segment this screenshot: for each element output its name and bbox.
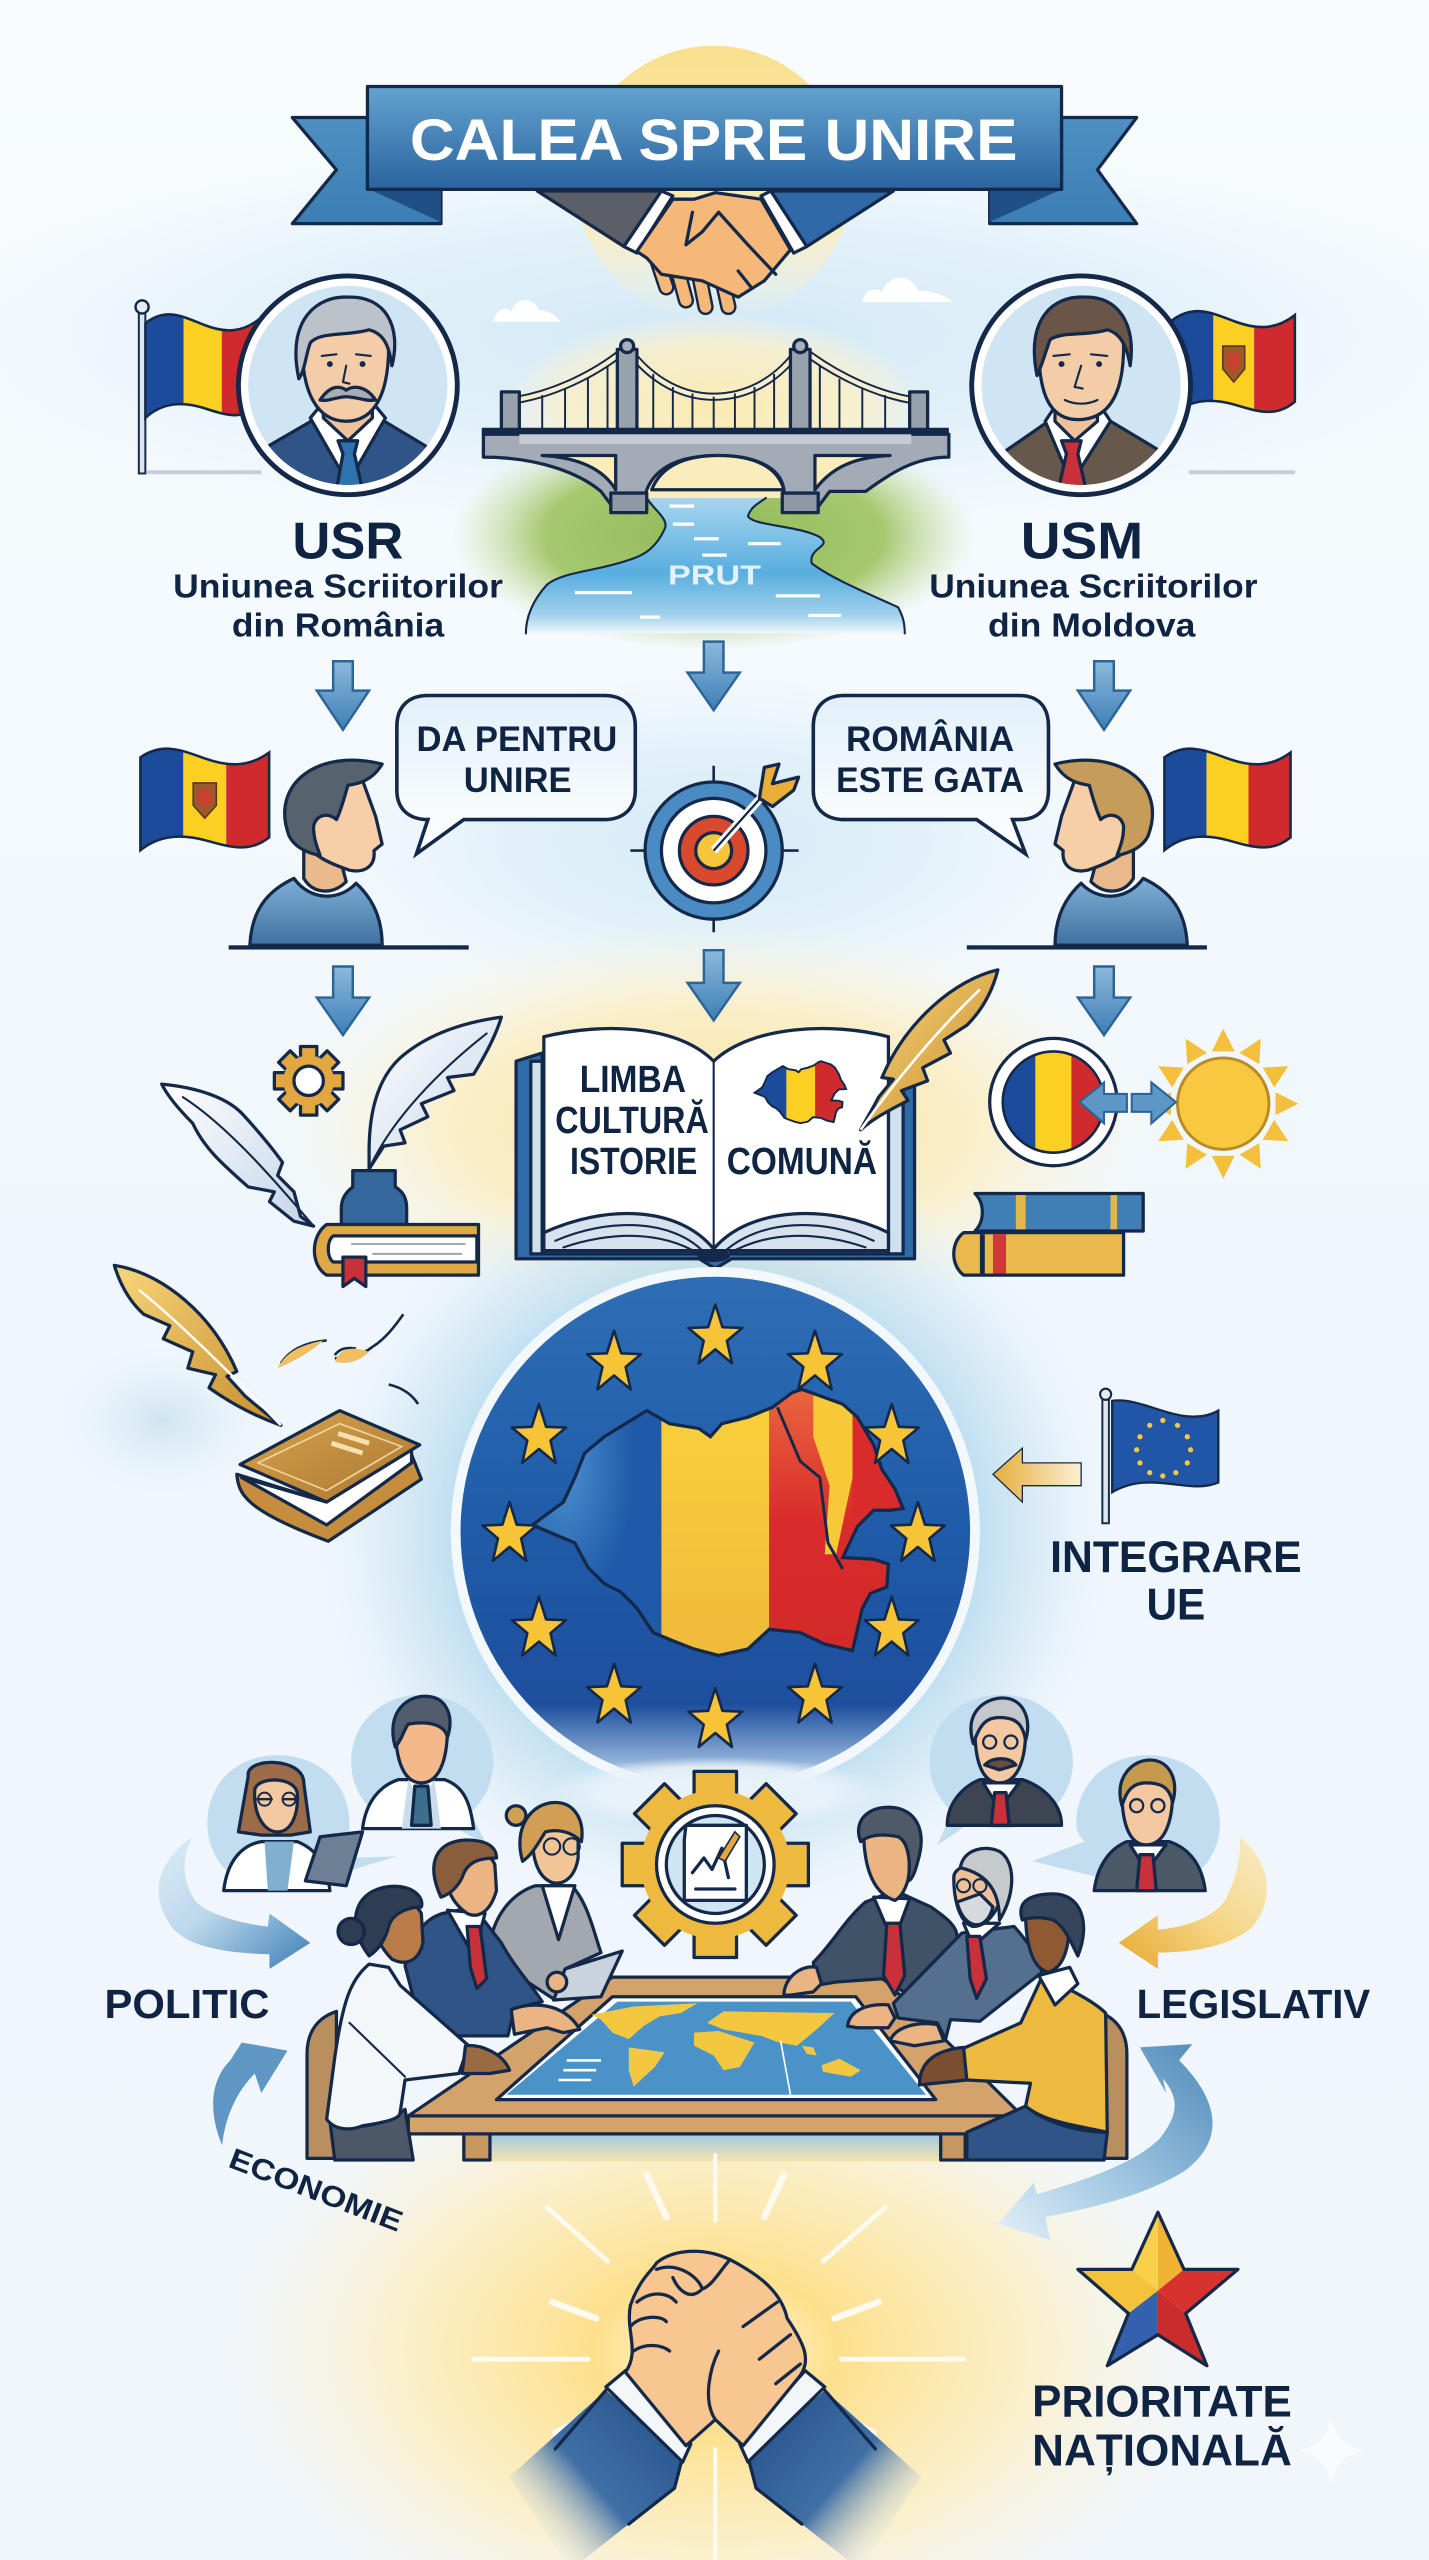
hand (511, 2005, 580, 2034)
river banks (452, 421, 975, 650)
person right with Romania flag (967, 748, 1291, 950)
icon: small gear (274, 1047, 343, 1115)
title banner (292, 87, 1137, 224)
hands (625, 2251, 806, 2446)
person left with Moldova flag (140, 748, 469, 950)
flag: Moldova (1173, 310, 1295, 424)
book text: COMUNĂ (727, 1140, 877, 1182)
figure (250, 760, 382, 945)
paper held (547, 1951, 622, 2000)
feather (114, 1265, 281, 1425)
advisor bubble: man in lab coat (351, 1695, 493, 1845)
portrait left with flag (136, 276, 457, 498)
small map (752, 1059, 849, 1125)
brown book (237, 1447, 421, 1541)
bridge cables (516, 348, 911, 400)
icon: target with arrow (630, 764, 799, 932)
label: prioritate națională (1032, 2377, 1292, 2475)
curved arrow: lower left (213, 2042, 287, 2145)
curved arrow: upper right (1119, 1837, 1267, 1969)
portrait: man with moustache (268, 295, 428, 485)
label: USM: Uniunea Scriitorilor (929, 569, 1258, 606)
icon: clouds (493, 278, 952, 322)
speech bubble left: DA PENTRU (416, 720, 617, 759)
hand (784, 1967, 821, 1995)
book text: ISTORIE (570, 1140, 697, 1182)
speech bubble right (813, 696, 1048, 854)
river (526, 498, 905, 633)
person: grey-haired man (848, 1848, 1042, 2046)
inkwell (341, 1171, 407, 1224)
ribbon left tail (292, 118, 441, 224)
person: man in dark suit (784, 1807, 957, 2020)
fingers (657, 258, 728, 307)
curved arrow: upper left (159, 1837, 310, 1969)
label: integrare UE (1050, 1533, 1302, 1630)
flag: Moldova (140, 748, 269, 860)
speech bubble right: ESTE GATA (836, 761, 1024, 800)
label: USR (173, 512, 503, 645)
icon: clasped hands (510, 2251, 921, 2560)
EU stars (483, 1304, 945, 1747)
portrait right with flag (972, 276, 1295, 498)
world map (496, 1997, 936, 2100)
arrow: left row 2 (317, 967, 369, 1035)
label: ECONOMIE: ECONOMIE (224, 2142, 407, 2239)
sun disc behind handshake (576, 46, 851, 320)
book text (555, 1058, 877, 1182)
table top (408, 1977, 1022, 2134)
icon: flag circle with double arrow and sun (990, 1029, 1298, 1179)
label: prioritate națională: NAȚIONALĂ (1032, 2425, 1292, 2475)
sun rays (1148, 1029, 1298, 1179)
cuffs (606, 2371, 691, 2462)
hands (848, 2005, 895, 2028)
label: USM: USM (1021, 512, 1143, 570)
double arrow (1080, 1082, 1127, 1123)
right sleeve (748, 2390, 921, 2560)
label: USR: USR (292, 512, 403, 570)
illustration: bridge over the Prut (452, 313, 975, 650)
advisor bubble: older man (929, 1695, 1073, 1845)
speech bubble left (397, 696, 635, 854)
icon: stacked books (954, 1193, 1143, 1275)
person: woman in white (327, 1886, 510, 2160)
arrow: gold pointing to disc (993, 1448, 1081, 1502)
sparkle watermark (1297, 2416, 1365, 2485)
flag pole (136, 300, 149, 473)
label: USR: Uniunea Scriitorilor (173, 569, 503, 606)
flag: Romania (145, 313, 260, 428)
flag: Romania (1164, 748, 1291, 860)
label: USM: din Moldova (988, 608, 1196, 645)
illustration: open book (516, 970, 998, 1269)
speech bubble left: UNIRE (464, 761, 572, 800)
icon: EU flag (1100, 1389, 1218, 1523)
portrait: man in brown suit (1005, 295, 1158, 485)
advisor bubble: man with glasses (1032, 1755, 1220, 1891)
label: prioritate națională: PRIORITATE (1032, 2377, 1292, 2426)
advisor bubble: woman with tablet (207, 1755, 397, 1891)
under table fill (490, 2134, 941, 2162)
label: integrare UE: INTEGRARE (1050, 1533, 1302, 1582)
ribbon right tail (990, 118, 1137, 224)
feather right (369, 1017, 501, 1169)
legs (464, 2132, 965, 2160)
label: POLITIC: POLITIC (105, 1981, 269, 2027)
label: USR: din România (232, 608, 445, 645)
rays around clasped hands (474, 2155, 964, 2560)
speech bubble right: ROMÂNIA (846, 719, 1014, 759)
water ripples (575, 506, 841, 617)
towers (617, 349, 637, 431)
feather left (162, 1084, 314, 1226)
left sleeve (510, 2390, 683, 2560)
ink strokes (281, 1314, 418, 1404)
deck and arches (483, 434, 949, 511)
book text: LIMBA (580, 1058, 686, 1100)
portrait frame (972, 276, 1191, 495)
arrow: center row 1 (688, 642, 740, 710)
chairs (307, 2011, 1127, 2158)
curved arrow: lower right (998, 2044, 1213, 2240)
label: integrare UE: UE (1146, 1581, 1205, 1630)
ribbon main panel (367, 87, 1062, 189)
figure (1055, 760, 1187, 945)
label: LEGISLATIV: LEGISLATIV (1137, 1981, 1370, 2027)
book text: CULTURĂ (555, 1099, 709, 1141)
icon: feathers, inkwell and book (162, 1017, 501, 1287)
icon: priority star (1078, 2212, 1238, 2366)
book (314, 1224, 479, 1275)
arrow: right row 1 (1078, 661, 1130, 730)
river label: PRUT (668, 559, 761, 590)
arrow: left row 1 (317, 661, 369, 730)
arrow: center row 2 (688, 950, 740, 1020)
portrait frame (238, 276, 457, 495)
icon: handshake (537, 191, 893, 307)
label: USM (929, 512, 1258, 645)
meeting table scene (307, 1802, 1127, 2162)
golden feather (861, 970, 998, 1130)
title: CALEA SPRE UNIRE (410, 108, 1017, 173)
continents (591, 2003, 861, 2087)
person: man in navy suit (405, 1840, 580, 2036)
arrow: right row 2 (1078, 967, 1130, 1035)
person: man in yellow sweater (919, 1894, 1107, 2160)
icon: gold feather and brown book (114, 1265, 421, 1541)
gear with chart (622, 1771, 808, 1958)
central disc: Europe and map of Romania (451, 1267, 980, 1829)
document (684, 1825, 746, 1900)
map of Romania (531, 1388, 906, 1658)
person: woman in grey (490, 1802, 601, 2000)
flag circle (990, 1038, 1117, 1166)
